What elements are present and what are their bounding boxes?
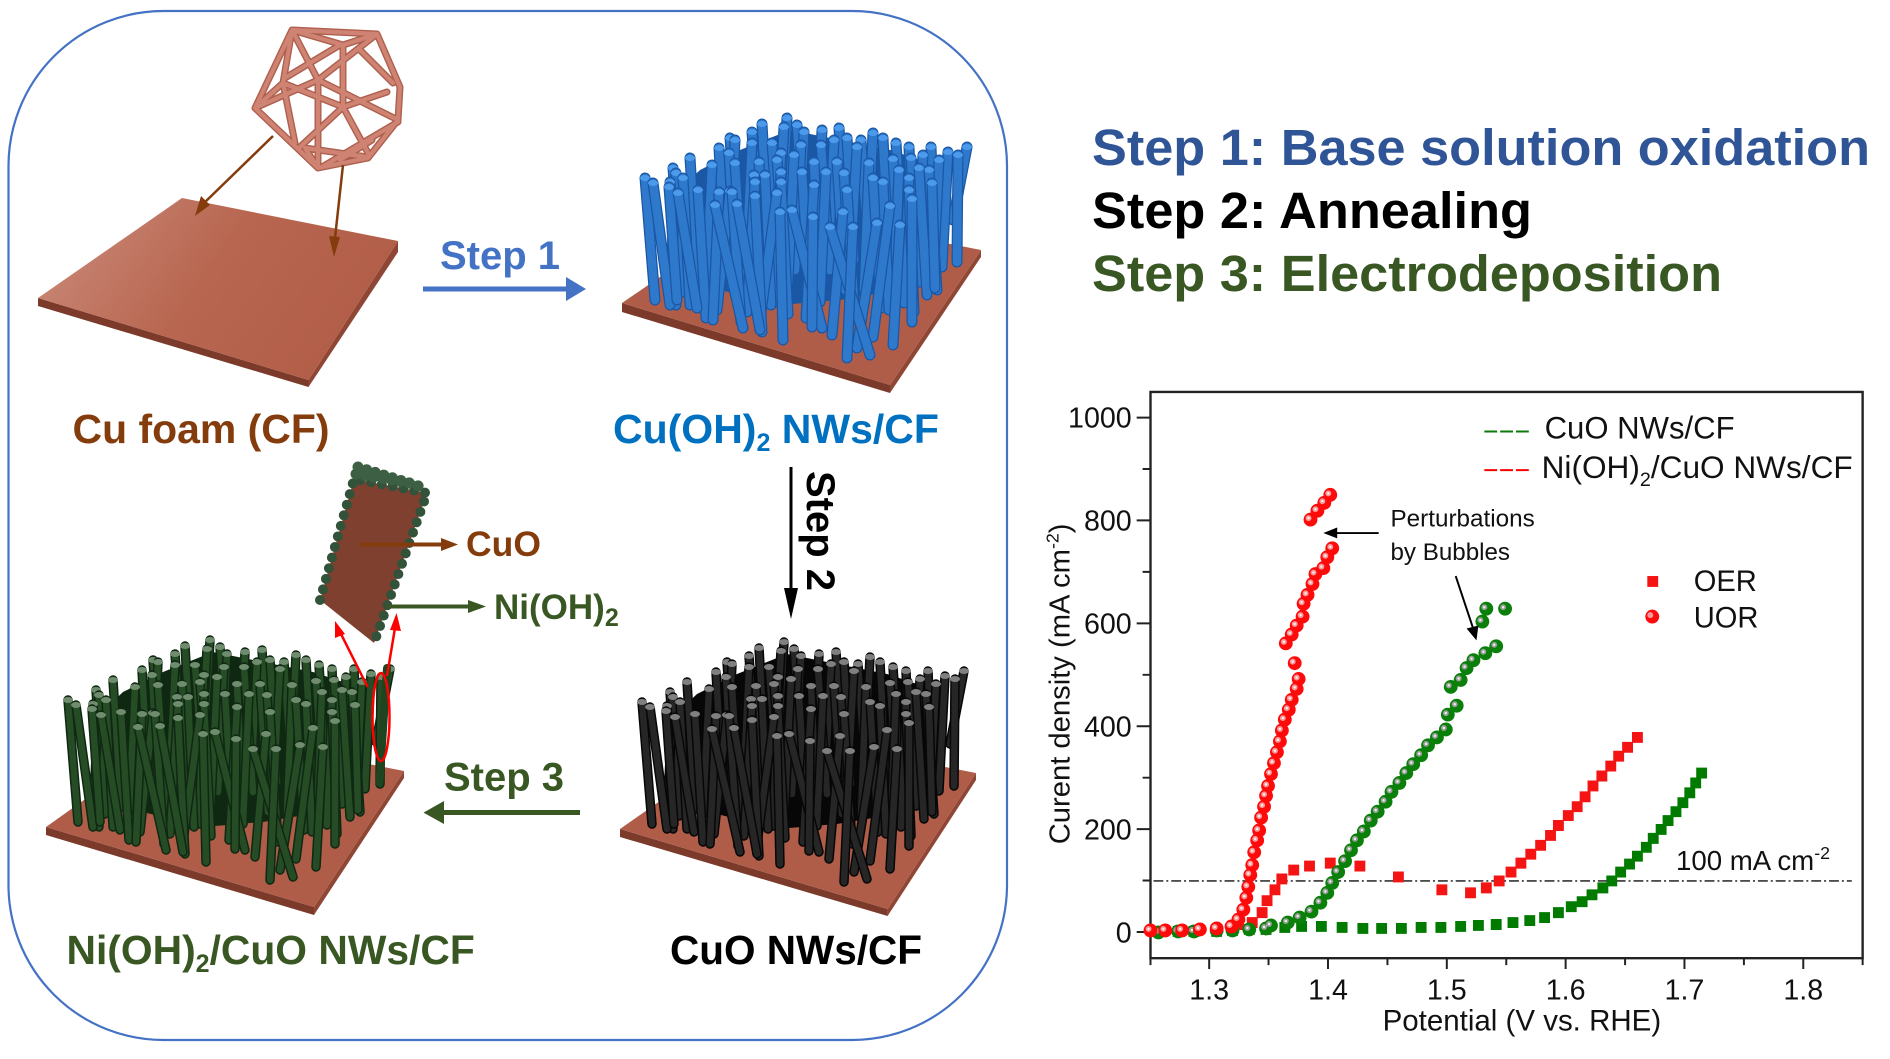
y axis tick labels — [1068, 402, 1132, 949]
label: step 1: Step 1 — [440, 234, 560, 278]
label: step 3: Step 3 — [444, 756, 564, 800]
x axis tick labels: 1.3 — [1189, 975, 1229, 1007]
label: Cu(OH)2 NWs/CF: 2 — [756, 429, 770, 457]
annotation: perturbations by bubbles: by Bubbles — [1391, 539, 1510, 566]
step 1 heading: Step 1: Base solution oxidation — [1092, 119, 1870, 176]
x axis tick labels — [1189, 975, 1823, 1007]
reference line 100 mA/cm2 — [1153, 880, 1852, 882]
series: CuO NWs/CF OER squares — [1178, 773, 1702, 931]
arrow: Ni(OH)2 pointer — [387, 600, 486, 613]
nanowire cross-section — [320, 467, 427, 643]
heading: process steps — [1092, 119, 1870, 302]
series: Ni(OH)2/CuO OER squares — [1238, 737, 1637, 924]
legend: catalysts: /CuO NWs/CF — [1651, 449, 1853, 485]
block: Ni(OH)2/CuO nanowires — [46, 637, 404, 915]
label: CuO NWs/CF: CuO NWs/CF — [670, 927, 922, 973]
arrow: step 1 — [423, 277, 586, 301]
arrows: foam to plate — [195, 136, 343, 257]
y axis title: -2 — [1043, 533, 1063, 549]
annotation: perturbations by bubbles: Perturbations — [1391, 505, 1535, 533]
legend: catalysts — [1484, 410, 1853, 491]
label: CuO: CuO — [466, 524, 541, 564]
arrow: step 3 — [424, 801, 580, 824]
icon: copper foam polyhedron — [255, 30, 400, 168]
legend: catalysts: Ni(OH) — [1542, 449, 1640, 485]
label: step 2: Step 2 — [798, 471, 842, 591]
y axis tick labels: 1000 — [1068, 402, 1132, 435]
y axis tick labels: 800 — [1084, 505, 1132, 537]
label: Cu(OH)2 NWs/CF: Cu(OH) — [613, 406, 756, 452]
legend: OER and UOR: UOR — [1694, 602, 1758, 635]
block: CuO nanowires — [620, 639, 976, 916]
label: 100 mA cm-2: 100 mA cm — [1676, 845, 1814, 876]
arrow: CuO pointer — [360, 538, 458, 551]
step 3 heading: Step 3: Electrodeposition — [1092, 245, 1722, 302]
chart: current density vs potential — [1043, 392, 1863, 1037]
y axis tick labels: 200 — [1084, 814, 1132, 846]
legend: catalysts: CuO NWs/CF — [1545, 410, 1735, 445]
annotation: perturbations by bubbles — [1391, 505, 1535, 566]
y axis title: ) — [1045, 524, 1077, 533]
step 2 heading: Step 2: Annealing — [1092, 182, 1532, 239]
label: Ni(OH)2: Ni(OH) — [494, 588, 605, 627]
arrow: step 2 — [784, 467, 798, 619]
callout: red ellipse and arrows — [335, 613, 401, 761]
x axis tick labels: 1.8 — [1783, 975, 1823, 1007]
label: Ni(OH)2/CuO NWs/CF: /CuO NWs/CF — [210, 927, 475, 973]
y axis tick labels: 400 — [1084, 711, 1132, 743]
label: Cu foam: Cu foam (CF) — [72, 406, 330, 452]
label: 100 mA cm-2: -2 — [1814, 843, 1830, 863]
legend: catalysts: 2 — [1640, 469, 1651, 491]
x axis tick labels: 1.6 — [1546, 975, 1586, 1007]
annotation arrows — [1323, 528, 1478, 640]
series: CuO NWs/CF UOR circles — [1156, 607, 1505, 932]
label: Ni(OH)2/CuO NWs/CF: 2 — [196, 950, 210, 978]
y axis tick labels: 0 — [1116, 917, 1132, 949]
series: Ni(OH)2/CuO UOR circles — [1149, 493, 1332, 930]
label: Ni(OH)2: 2 — [605, 604, 619, 632]
label: Ni(OH)2/CuO NWs/CF: Ni(OH) — [66, 927, 196, 973]
y axis title: Curent density (mA cm — [1045, 549, 1077, 844]
panel: synthesis scheme — [8, 11, 1007, 1040]
x axis tick labels: 1.4 — [1308, 975, 1348, 1007]
plate: copper foam — [38, 198, 398, 387]
y axis tick labels: 600 — [1084, 608, 1132, 640]
label: Cu(OH)2 NWs/CF: NWs/CF — [770, 406, 939, 452]
legend: OER and UOR: OER — [1694, 566, 1757, 598]
x axis tick labels: 1.5 — [1427, 975, 1467, 1007]
x axis title: Potential (V vs. RHE) — [1383, 1005, 1661, 1037]
block: Cu(OH)2 nanowires — [622, 115, 981, 393]
x axis tick labels: 1.7 — [1665, 975, 1704, 1007]
legend: OER and UOR — [1645, 566, 1758, 635]
